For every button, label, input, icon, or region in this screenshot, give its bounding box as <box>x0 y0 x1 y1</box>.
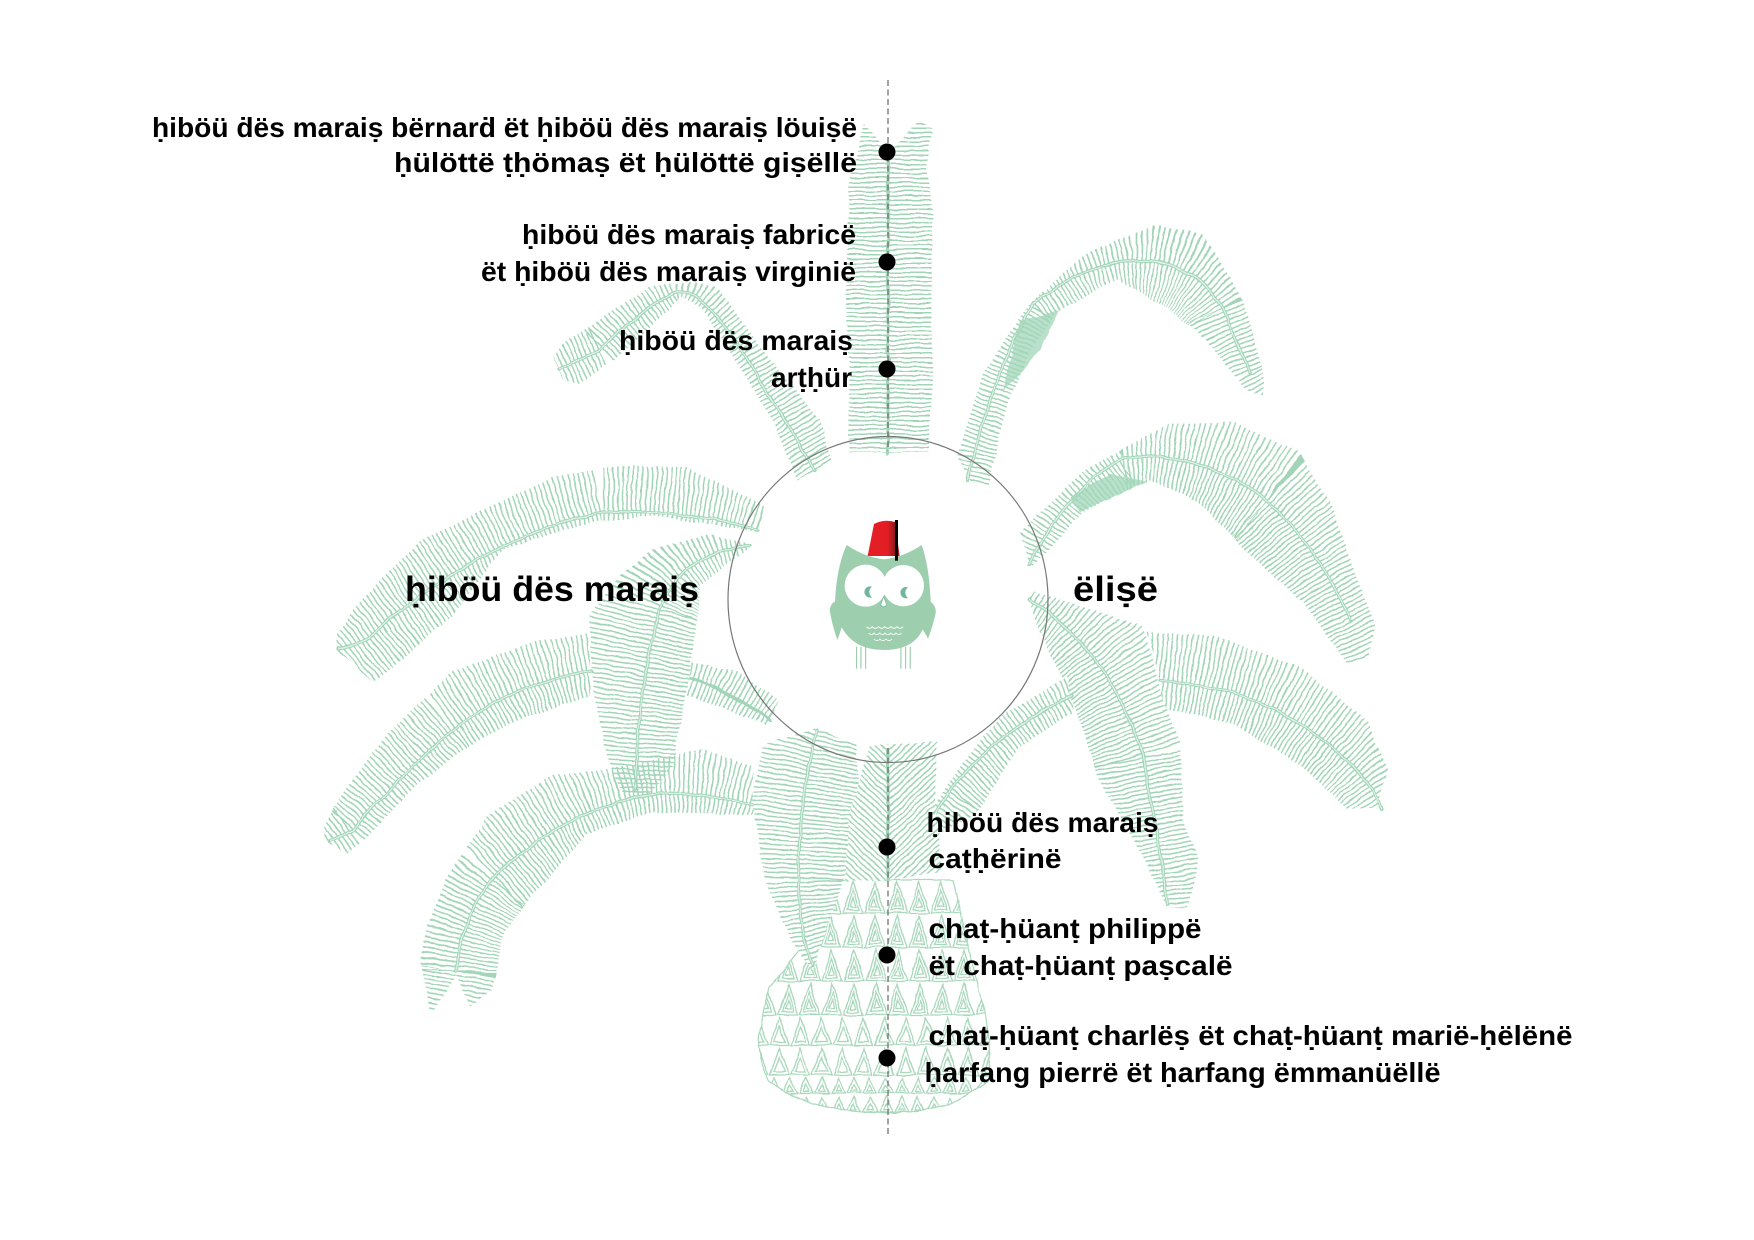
label line: ḥiböü ḋës maraiṣ fabricë <box>522 219 856 250</box>
infographic canvas <box>154 80 1572 1134</box>
frond: left small near circle <box>687 662 780 725</box>
frond: bottom centre crown <box>844 741 942 882</box>
heading: hibou des marais: ḥiböü ḋës maraiṣ <box>405 570 699 609</box>
icon: owl wearing a red fez <box>830 520 936 669</box>
group: owl pair bernard and louise, hulotte pair <box>152 112 896 178</box>
owl beak <box>881 597 887 607</box>
label line: ḥiböü ḋës maraiṣ <box>619 325 853 356</box>
frond: lower left large <box>450 794 755 1012</box>
label line: ḥiböü ḋës maraiṣ bërnarḋ ët ḥiböü ḋës maraiṣ löuiṣë <box>152 112 857 143</box>
label line: chaṭ-ḥüanṭ philippë <box>928 913 1202 944</box>
frond: upper right <box>957 224 1263 488</box>
owl eyes <box>845 565 924 607</box>
frond: left upper <box>335 466 767 682</box>
group: catherine <box>878 807 1158 874</box>
palm tree fronds and trunk <box>323 118 1387 1114</box>
frond: left middle <box>323 634 592 854</box>
label line: ët ḥiböü ḋës maraiṣ virginië <box>481 256 856 287</box>
label line: caṭḥërinë <box>928 843 1062 874</box>
frond: bottom centre vertical <box>752 728 858 970</box>
marker dot <box>878 144 896 160</box>
label line: ḥülöttë ṭḥömaṣ ët ḥülöttë giṣëllë <box>394 147 857 178</box>
central circle <box>728 436 1048 762</box>
marker dot <box>878 946 896 964</box>
label line: chaṭ-ḥüanṭ charlëṣ ët chaṭ-ḥüanṭ marië-ḥëlënë <box>928 1020 1572 1051</box>
palm trunk <box>740 880 1000 1114</box>
owl belly feathers <box>866 627 903 641</box>
label line: arṭḥür <box>771 362 852 393</box>
frond: right middle <box>1020 422 1375 663</box>
heading: élise: ëliṣë <box>1073 570 1158 609</box>
label line: ḥarfang pierrë ët ḥarfang ëmmanüëllë <box>924 1057 1440 1088</box>
frond: right lower horizontal <box>1145 632 1387 808</box>
fez hat <box>868 521 900 556</box>
frond: lower right small <box>925 677 1073 835</box>
group: fabrice and virginie <box>481 219 896 287</box>
group: charles, marie-hélène, pierre, emmanuelle <box>878 1020 1572 1088</box>
dashed vertical axis <box>887 80 889 1135</box>
frond: left centre hanging <box>590 534 752 800</box>
group: philippe and pascale <box>878 913 1232 981</box>
frond: top centre vertical <box>846 118 933 453</box>
marker dot <box>878 360 896 378</box>
frond: upper left arch <box>543 282 832 480</box>
marker dot <box>878 838 896 856</box>
label line: ët chaṭ-ḥüanṭ paṣcalë <box>928 950 1232 981</box>
owl body <box>830 545 936 650</box>
fez tassel <box>895 520 898 561</box>
frond: right hanging <box>1030 590 1199 910</box>
label line: ḥiböü ḋës maraiṣ <box>926 807 1158 838</box>
marker dot <box>878 254 896 270</box>
group: arthur <box>619 325 896 393</box>
owl legs <box>856 647 911 669</box>
marker dot <box>878 1050 896 1066</box>
